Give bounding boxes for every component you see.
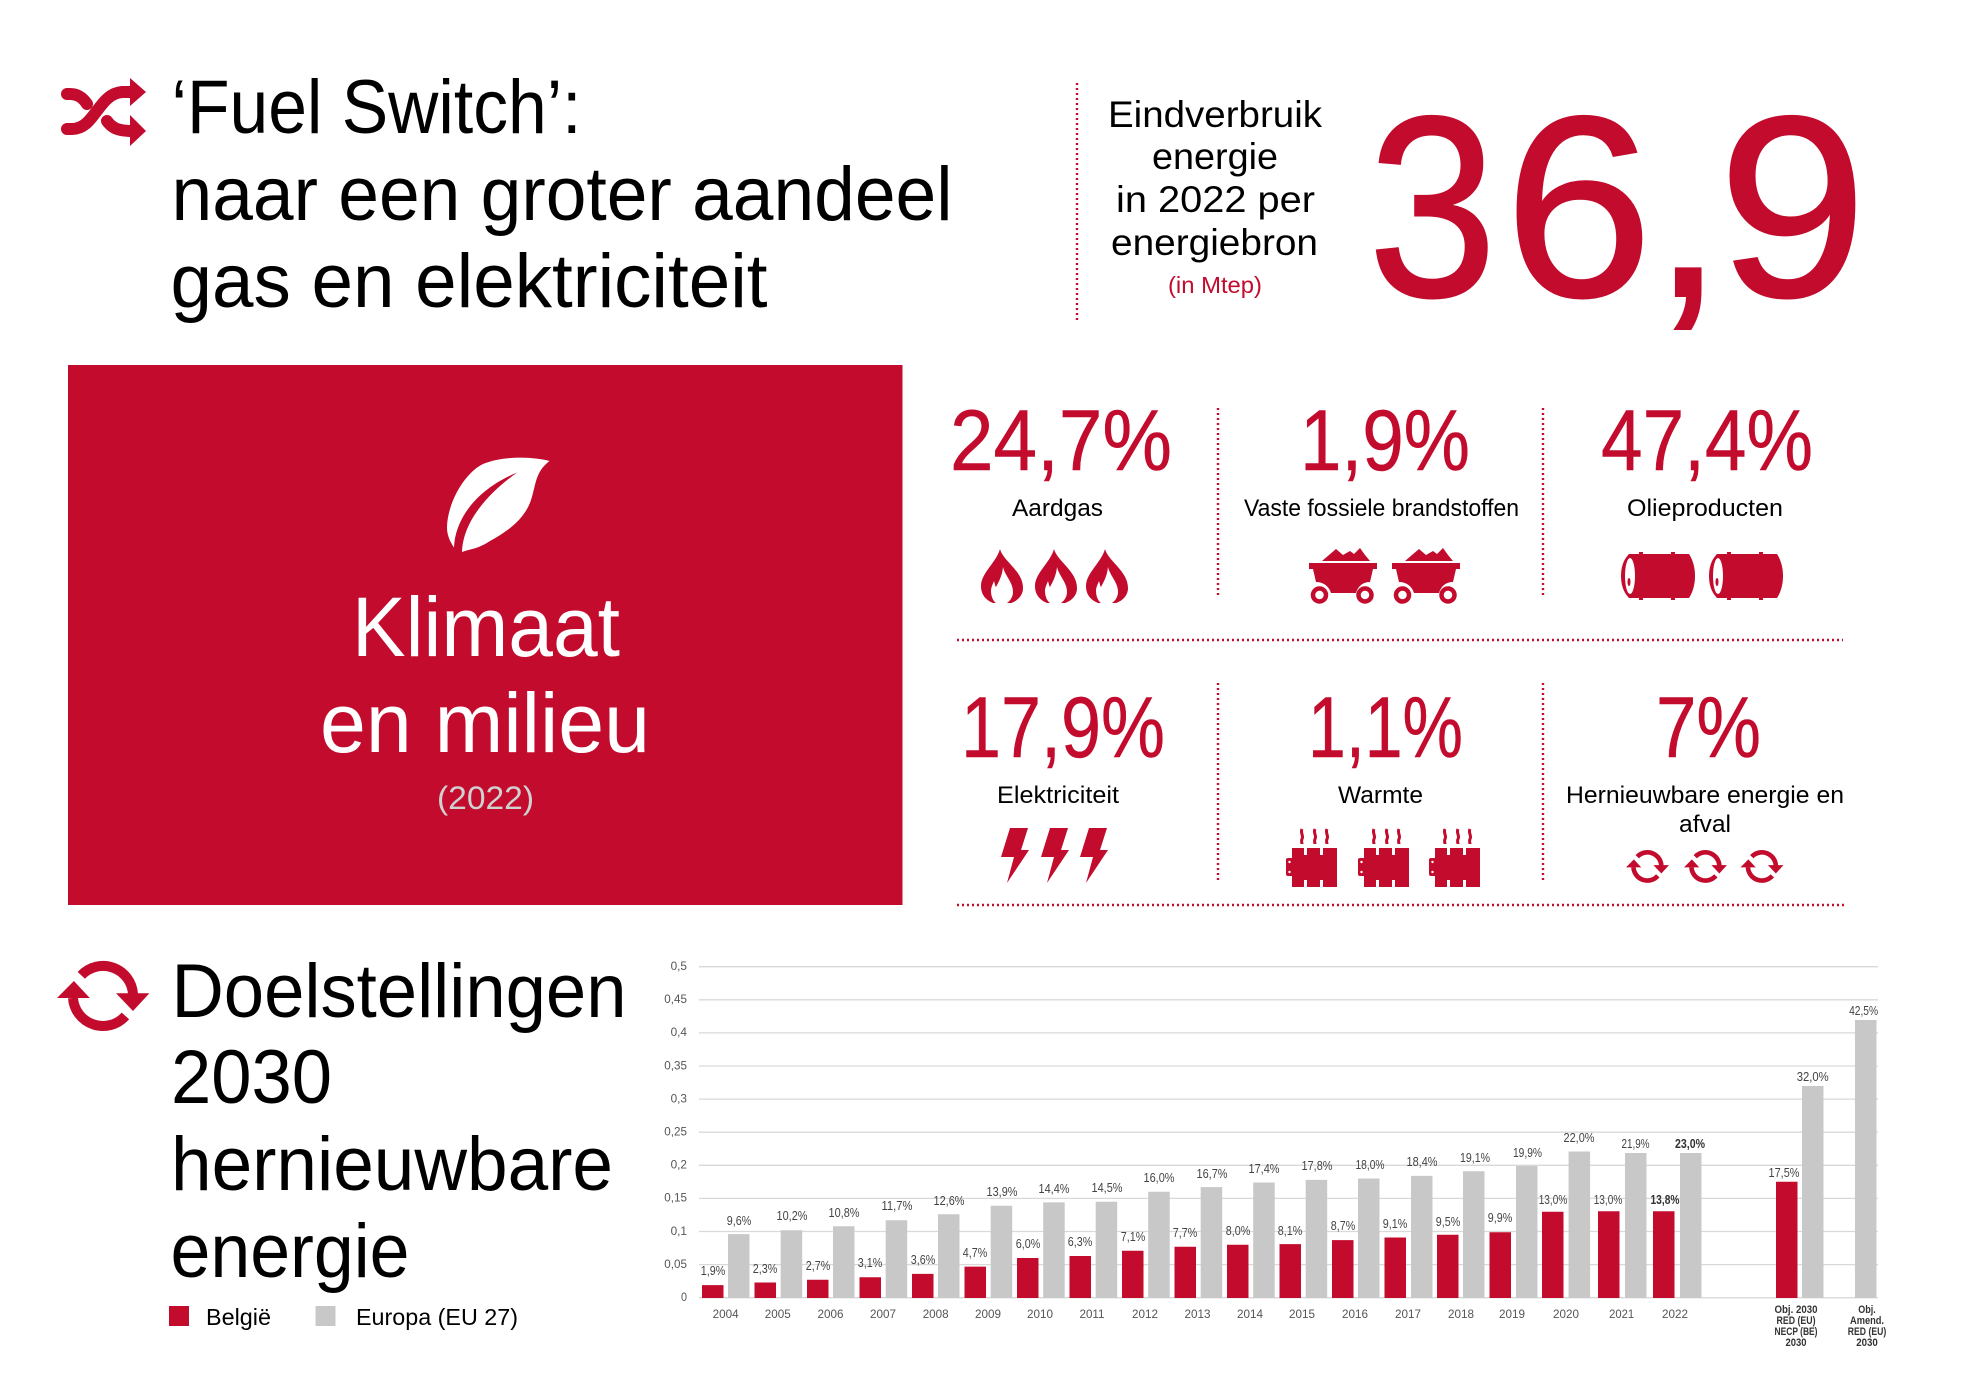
legend <box>169 1304 518 1330</box>
x axis year labels: 2016 <box>1342 1307 1368 1321</box>
data labels: Europe: 42,5% <box>1849 1003 1878 1018</box>
x axis year labels: 2004 <box>713 1307 739 1321</box>
target label: amended RED 2030: 2030 <box>1856 1337 1878 1349</box>
data labels: Belgium: 9,9% <box>1488 1210 1513 1225</box>
x axis year labels: 2018 <box>1448 1307 1474 1321</box>
y axis labels <box>664 959 687 1304</box>
data labels: Europe: 17,8% <box>1302 1158 1333 1173</box>
y axis labels: 0,5 <box>671 959 687 973</box>
data labels: Belgium: 2,7% <box>806 1258 831 1273</box>
target label: amended RED 2030 <box>1848 1304 1886 1349</box>
x axis year labels: 2008 <box>923 1307 949 1321</box>
stat: heat: Warmte <box>1338 782 1423 809</box>
panel heading: Klimaat <box>352 580 620 674</box>
target label: amended RED 2030: RED (EU) <box>1848 1326 1886 1338</box>
heading: 2030 targets: Doelstellingen <box>172 949 626 1034</box>
x axis year labels: 2015 <box>1289 1307 1315 1321</box>
data labels: Europe: 14,5% <box>1092 1180 1123 1195</box>
data labels: Belgium: 3,6% <box>911 1252 936 1267</box>
data labels: Europe: 18,0% <box>1356 1157 1385 1172</box>
data labels: Europe: 14,4% <box>1038 1181 1070 1196</box>
data labels: Belgium: 3,1% <box>858 1255 883 1270</box>
heading: 2030 targets: 2030 <box>171 1035 332 1120</box>
x axis year labels: 2011 <box>1080 1307 1105 1321</box>
heading: 2030 targets: hernieuwbare <box>171 1122 613 1207</box>
data labels: Belgium: 8,0% <box>1226 1223 1251 1238</box>
heading: 2030 targets: energie <box>170 1209 410 1294</box>
stat: natural gas: Aardgas <box>1012 495 1103 522</box>
icon: recycle arrows <box>1626 852 1783 881</box>
heading: 2030 targets <box>170 949 626 1294</box>
data labels: Belgium: 7,1% <box>1121 1229 1146 1244</box>
stat: solid fossil fuels: 1,9% <box>1300 393 1470 489</box>
big number: 36,9 <box>1368 62 1867 351</box>
x axis year labels: 2007 <box>870 1307 896 1321</box>
stat: oil products: 47,4% <box>1601 393 1813 489</box>
stat: solid fossil fuels: Vaste fossiele brandstoffen <box>1244 495 1519 522</box>
data labels: Europe: 17,4% <box>1248 1161 1280 1176</box>
stat: natural gas: 24,7% <box>950 393 1172 489</box>
stat: electricity <box>961 680 1165 883</box>
data labels: Europe: 21,9% <box>1622 1136 1650 1151</box>
data labels: Europe: 9,6% <box>727 1213 752 1228</box>
data labels: Belgium: 8,1% <box>1278 1223 1303 1238</box>
x axis year labels: 2006 <box>818 1307 844 1321</box>
data labels: Belgium: 13,0% <box>1539 1192 1568 1207</box>
x axis year labels <box>713 1307 1688 1321</box>
text: final consumption description: Eindverbruik <box>1108 94 1323 135</box>
big number: 36,9: , <box>1652 62 1724 351</box>
stat: renewable energy and waste <box>1566 680 1844 881</box>
y axis labels: 0,15 <box>664 1191 687 1205</box>
icon: lightning bolts <box>1001 828 1108 883</box>
stat: renewable energy and waste: Hernieuwbare energie en <box>1566 782 1844 809</box>
data labels: Europe: 16,0% <box>1144 1170 1175 1185</box>
stat: heat: 1,1% <box>1308 680 1463 776</box>
y axis labels: 0 <box>681 1290 687 1304</box>
x axis year labels: 2017 <box>1395 1307 1421 1321</box>
data labels: Belgium: 9,1% <box>1383 1216 1408 1231</box>
stat: solid fossil fuels <box>1244 393 1519 602</box>
bar chart: renewable energy share <box>664 959 1886 1349</box>
data labels: Europe: 19,1% <box>1460 1150 1490 1165</box>
data labels: Europe: 32,0% <box>1797 1069 1829 1084</box>
target label: NECP and RED 2030: 2030 <box>1786 1337 1806 1349</box>
stat: renewable energy and waste: 7% <box>1656 680 1761 776</box>
stat: natural gas <box>950 393 1172 603</box>
icon: oil barrels <box>1621 552 1783 600</box>
big number: 36,9: 3 <box>1368 62 1497 351</box>
icon: flames <box>981 549 1128 603</box>
data labels: Belgium: 7,7% <box>1173 1225 1198 1240</box>
data labels: Belgium: 8,7% <box>1331 1218 1356 1233</box>
stat: electricity: Elektriciteit <box>997 782 1119 809</box>
panel heading <box>320 580 650 770</box>
data labels: Europe: 23,0% <box>1675 1136 1705 1151</box>
data labels: Belgium <box>701 1165 1800 1278</box>
data labels: Belgium: 6,0% <box>1016 1236 1041 1251</box>
data labels: Belgium: 13,0% <box>1594 1192 1623 1207</box>
data labels: Belgium: 17,5% <box>1768 1165 1800 1180</box>
stat: heat <box>1286 680 1480 887</box>
data labels: Belgium: 6,3% <box>1068 1234 1093 1249</box>
text: final consumption description: (in Mtep) <box>1168 272 1262 298</box>
data labels: Belgium: 13,8% <box>1650 1192 1680 1207</box>
icon: leaf <box>447 458 550 552</box>
target label: amended RED 2030: Obj. <box>1858 1304 1876 1316</box>
y axis labels: 0,1 <box>671 1224 687 1238</box>
big number: 36,9: 9 <box>1718 62 1867 351</box>
text: final consumption description: energie <box>1152 136 1278 177</box>
text: final consumption description <box>1108 94 1323 298</box>
icon: refresh arrows <box>57 966 149 1026</box>
x axis year labels: 2019 <box>1499 1307 1525 1321</box>
y axis labels: 0,2 <box>671 1158 687 1172</box>
x axis year labels: 2013 <box>1184 1307 1211 1321</box>
icon: coal carts <box>1309 548 1460 602</box>
data labels: Belgium: 2,3% <box>753 1261 778 1276</box>
data labels: Europe: 19,9% <box>1513 1145 1542 1160</box>
x axis year labels: 2021 <box>1609 1307 1634 1321</box>
data labels: Europe: 12,6% <box>934 1193 965 1208</box>
data labels: Belgium: 1,9% <box>701 1263 726 1278</box>
panel year: (2022) <box>437 780 534 816</box>
data labels: Europe: 10,8% <box>828 1205 860 1220</box>
x axis year labels: 2009 <box>975 1307 1001 1321</box>
icon: radiators <box>1286 829 1480 887</box>
data labels: Europe: 11,7% <box>882 1198 913 1213</box>
title: gas en elektriciteit <box>170 239 768 324</box>
x axis year labels: 2022 <box>1662 1307 1688 1321</box>
stat: oil products <box>1601 393 1813 600</box>
icon: shuffle arrows <box>67 78 146 146</box>
y axis labels: 0,4 <box>671 1025 687 1039</box>
y axis labels: 0,3 <box>671 1091 687 1105</box>
title: naar een groter aandeel <box>172 152 952 237</box>
x axis year labels: 2020 <box>1553 1307 1579 1321</box>
text: final consumption description: energiebron <box>1111 222 1318 263</box>
y axis labels: 0,25 <box>664 1124 687 1138</box>
data labels: Europe: 10,2% <box>776 1208 808 1223</box>
x axis year labels: 2014 <box>1237 1307 1263 1321</box>
data labels: Europe <box>727 1003 1878 1228</box>
data labels: Europe: 22,0% <box>1564 1130 1595 1145</box>
target label: NECP and RED 2030 <box>1774 1304 1818 1349</box>
panel heading: en milieu <box>320 676 650 770</box>
data labels: Europe: 16,7% <box>1196 1166 1228 1181</box>
legend: Europa (EU 27) <box>356 1304 518 1330</box>
title: ‘Fuel Switch’: <box>172 65 582 150</box>
legend: België <box>206 1304 271 1330</box>
data labels: Europe: 18,4% <box>1406 1154 1438 1169</box>
y axis labels: 0,45 <box>664 992 687 1006</box>
y axis labels: 0,05 <box>664 1257 687 1271</box>
bars: Belgium <box>702 1182 1798 1298</box>
text: final consumption description: in 2022 per <box>1116 179 1315 220</box>
bars: Europe <box>728 1020 1876 1298</box>
target label: NECP and RED 2030: RED (EU) <box>1776 1315 1816 1327</box>
panel: climate and environment <box>68 365 902 905</box>
x axis year labels: 2005 <box>765 1307 791 1321</box>
y axis labels: 0,35 <box>664 1058 687 1072</box>
stat: renewable energy and waste: afval <box>1679 811 1731 838</box>
stat: oil products: Olieproducten <box>1627 495 1783 522</box>
x axis year labels: 2010 <box>1027 1307 1053 1321</box>
title <box>170 65 952 324</box>
data labels: Europe: 13,9% <box>986 1184 1018 1199</box>
data labels: Belgium: 4,7% <box>963 1245 988 1260</box>
target label: amended RED 2030: Amend. <box>1850 1315 1884 1327</box>
big number: 36,9: 6 <box>1504 62 1653 351</box>
data labels: Belgium: 9,5% <box>1436 1214 1461 1229</box>
x axis year labels: 2012 <box>1132 1307 1158 1321</box>
target label: NECP and RED 2030: NECP (BE) <box>1774 1326 1818 1338</box>
target label: NECP and RED 2030: Obj. 2030 <box>1774 1304 1818 1316</box>
stat: electricity: 17,9% <box>961 680 1165 776</box>
